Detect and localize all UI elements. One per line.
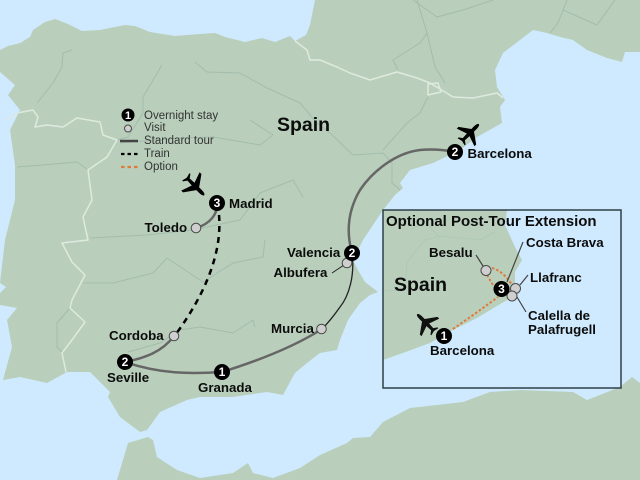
land: North Africa bbox=[117, 377, 640, 480]
stop: Toledo: Toledo bbox=[144, 220, 187, 235]
country borders bbox=[7, 41, 503, 372]
inset route: option bbox=[453, 268, 512, 329]
stop: Granada bbox=[198, 364, 253, 395]
legend: train: Train bbox=[144, 148, 170, 160]
inset stop: Besalu bbox=[429, 245, 491, 276]
stop: Murcia: Murcia bbox=[271, 321, 314, 336]
inset border bbox=[383, 210, 621, 388]
inset stop: Calella de Palafrugell: Palafrugell bbox=[528, 322, 596, 337]
stop: Granada: 1 bbox=[219, 365, 226, 379]
inset rivers bbox=[383, 222, 495, 291]
legend: option: Option bbox=[144, 161, 178, 173]
stop: Barcelona: Barcelona bbox=[468, 146, 532, 161]
stop: Seville bbox=[107, 354, 149, 385]
legend bbox=[120, 108, 218, 173]
inset stop: Costa Brava: Costa Brava bbox=[526, 235, 604, 250]
stop: Madrid: Madrid bbox=[229, 196, 273, 211]
stop: Cordoba: Cordoba bbox=[109, 328, 164, 343]
icon: plane near Barcelona bbox=[452, 115, 488, 151]
stop: Barcelona: 2 bbox=[452, 145, 459, 159]
icon: plane near Madrid bbox=[177, 168, 213, 204]
inset leader lines bbox=[476, 242, 528, 312]
stop: Madrid bbox=[209, 195, 273, 211]
stop: Albufera bbox=[274, 258, 352, 280]
inset stop: Barcelona bbox=[430, 328, 495, 358]
inset land bbox=[383, 210, 522, 360]
stop: Albufera: Albufera bbox=[274, 265, 328, 280]
route: train Madrid to Cordoba bbox=[176, 215, 219, 334]
legend: standard tour: Standard tour bbox=[144, 135, 214, 147]
stop: Barcelona bbox=[447, 144, 532, 161]
inset stop: Barcelona: Barcelona bbox=[430, 343, 495, 358]
inset stop: Llafranc bbox=[510, 270, 582, 294]
rivers bbox=[17, 0, 615, 353]
stop: Granada: Granada bbox=[198, 380, 253, 395]
legend: overnight stay: Overnight stay bbox=[144, 110, 218, 122]
inset water bbox=[383, 210, 621, 388]
stop: Valencia: 2 bbox=[349, 246, 356, 260]
stop: Valencia: Valencia bbox=[287, 245, 341, 260]
route: standard tour lines bbox=[125, 150, 455, 373]
inset stop: Llafranc: Llafranc bbox=[530, 270, 582, 285]
legend: overnight stay: 1 bbox=[125, 110, 131, 122]
inset title: Optional Post-Tour Extension bbox=[386, 213, 597, 230]
legend: visit: Visit bbox=[144, 122, 166, 134]
leader: Albufera bbox=[332, 265, 344, 273]
inset stop: Costa Brava: 3 bbox=[498, 282, 505, 296]
inset stop: Calella de Palafrugell bbox=[507, 291, 596, 337]
inset icon: plane bbox=[408, 305, 444, 341]
stop: Seville: 2 bbox=[122, 355, 129, 369]
stop: Valencia bbox=[287, 245, 360, 261]
inset heading: Spain: Spain bbox=[394, 274, 447, 296]
heading: Spain: Spain bbox=[277, 114, 330, 136]
panel: Optional Post-Tour Extension inset bbox=[383, 210, 621, 388]
stop: Madrid: 3 bbox=[214, 196, 221, 210]
inset stop: Costa Brava bbox=[494, 235, 604, 297]
legend: overnight stay bbox=[122, 108, 218, 122]
stop: Seville: Seville bbox=[107, 370, 149, 385]
inset stop: Besalu: Besalu bbox=[429, 245, 473, 260]
inset stop: Barcelona: 1 bbox=[441, 329, 448, 343]
inset stop: Calella de Palafrugell: Calella de bbox=[528, 308, 590, 323]
